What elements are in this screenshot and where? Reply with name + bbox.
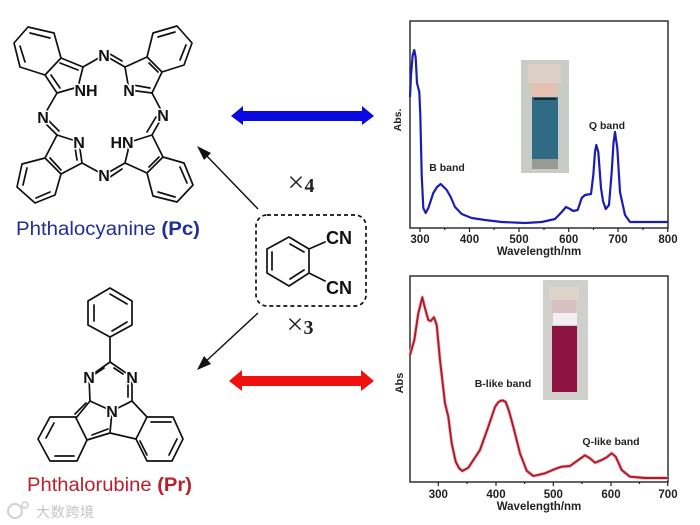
label: times 4: ×4: [288, 166, 314, 199]
image: red cuvette: [543, 280, 588, 400]
chart: Pr absorption spectrum: Abs: [394, 373, 406, 393]
chart: Pc absorption spectrum: Q band: [589, 120, 625, 132]
panel: phthalonitrile precursor: [256, 215, 366, 306]
chart: Pc absorption spectrum: Wavelength/nm: [497, 246, 581, 258]
molecule: phthalocyanine structure: HN: [110, 135, 134, 152]
molecule: phthalocyanine structure: N: [98, 168, 110, 185]
molecule: phthalocyanine structure: NH: [74, 83, 98, 100]
chart: Pr absorption spectrum: 400: [486, 489, 506, 501]
molecule: phthalocyanine structure: N: [157, 108, 169, 125]
chart: Pc absorption spectrum: B band: [429, 162, 465, 174]
chart: Pr absorption spectrum: 700: [658, 489, 678, 501]
molecule: phthalorubine structure: [38, 288, 183, 461]
chart: Pr absorption spectrum: 500: [544, 489, 563, 501]
arrow: to phthalorubine: [197, 313, 258, 370]
chart: Pr absorption spectrum: 600: [601, 489, 621, 501]
label: times 3: ×3: [287, 308, 313, 341]
chart: Pr absorption spectrum: Wavelength/nm: [497, 501, 581, 513]
panel: phthalonitrile precursor: CN: [326, 228, 352, 248]
molecule: phthalorubine structure: N: [83, 370, 95, 387]
panel: phthalonitrile precursor: CN: [326, 278, 352, 298]
molecule: phthalorubine structure: N: [126, 370, 138, 387]
chart: Pr absorption spectrum: [394, 276, 678, 513]
image: blue cuvette: [521, 60, 569, 173]
chart: Pc absorption spectrum: Abs.: [392, 109, 404, 131]
curve: red spectrum: [410, 297, 668, 478]
chart: Pc absorption spectrum: 800: [658, 234, 678, 246]
arrow: to phthalocyanine: [197, 146, 258, 209]
watermark: 大数跨境: [36, 504, 94, 520]
molecule: phthalocyanine structure: N: [37, 110, 49, 127]
chart: Pc absorption spectrum: 400: [460, 234, 479, 246]
arrow: blue double arrow: [231, 106, 374, 125]
chart: Pc absorption spectrum: 300: [410, 234, 430, 246]
molecule: phthalocyanine structure: [14, 26, 193, 203]
heading: Phthalorubine (Pr): Phthalorubine (Pr): [27, 475, 192, 496]
molecule: phthalocyanine structure: N: [98, 48, 110, 65]
chart: Pc absorption spectrum: [392, 21, 678, 258]
chart: Pr absorption spectrum: 300: [429, 489, 448, 501]
chart: Pr absorption spectrum: B-like band: [475, 378, 531, 390]
molecule: phthalocyanine structure: N: [123, 83, 135, 100]
arrow: red double arrow: [229, 370, 374, 391]
curve: blue spectrum: [410, 50, 668, 223]
watermark: [8, 502, 94, 520]
chart: Pr absorption spectrum: Q-like band: [582, 436, 640, 448]
chart: Pc absorption spectrum: 700: [608, 234, 628, 246]
heading: Phthalocyanine (Pc): Phthalocyanine (Pc): [16, 219, 200, 240]
chart: Pc absorption spectrum: 500: [509, 234, 529, 246]
molecule: phthalorubine structure: N: [106, 404, 118, 421]
molecule: phthalocyanine structure: N: [73, 135, 85, 152]
chart: Pc absorption spectrum: 600: [559, 234, 578, 246]
